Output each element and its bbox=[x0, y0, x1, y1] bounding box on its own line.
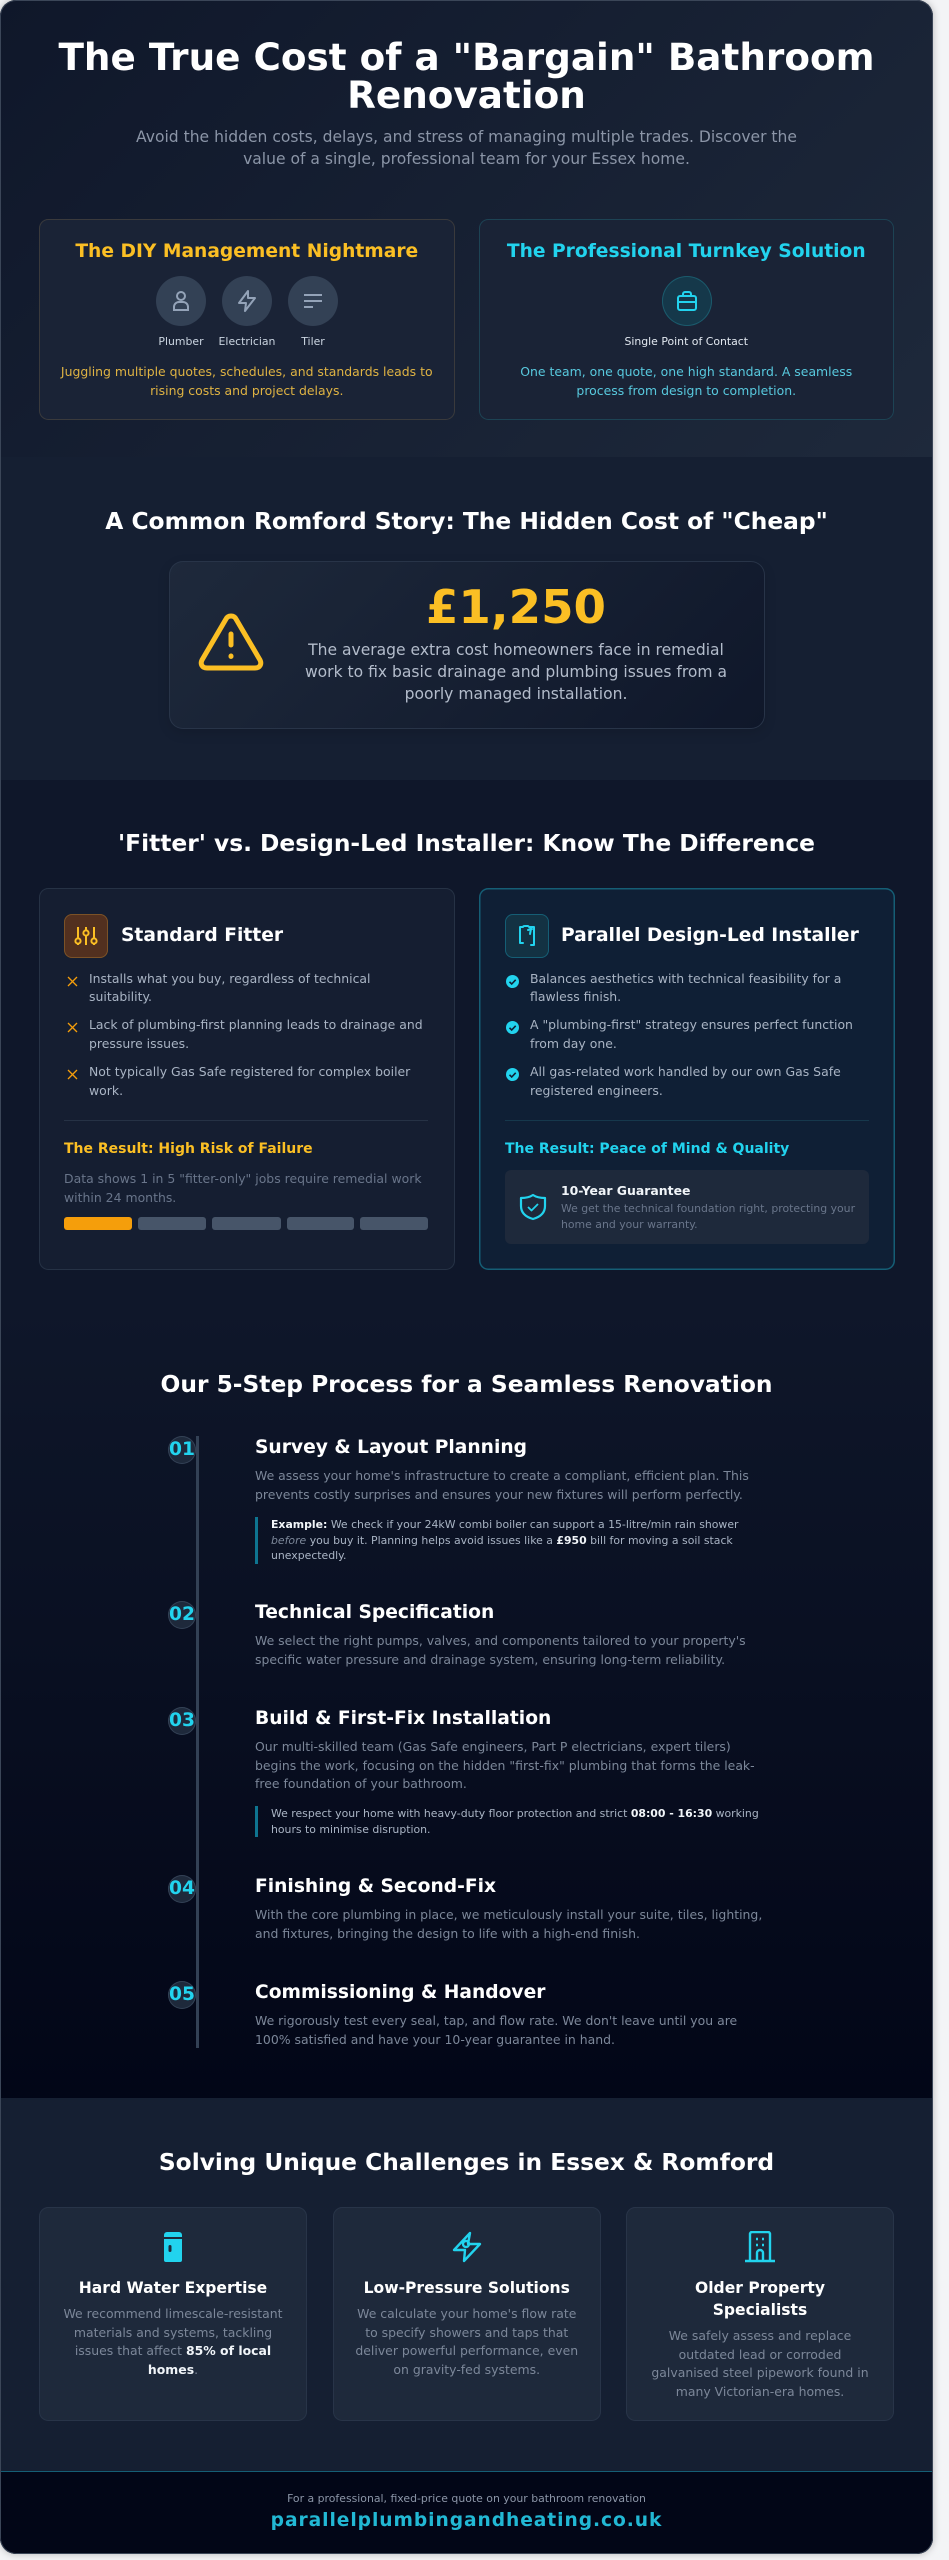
item: check 1: Balances aesthetics with technical feasibility for a bbox=[530, 970, 841, 986]
list: installer benefits bbox=[506, 970, 853, 1098]
badge 02: 02 bbox=[169, 1604, 195, 1625]
item: check 2: from day one. bbox=[530, 1036, 617, 1051]
heading: installer: Parallel Design-Led Installer bbox=[561, 925, 859, 946]
text: DIY summary bbox=[60, 364, 433, 398]
footer text: For a professional, fixed-price quote on your bathroom renovation bbox=[287, 2492, 646, 2505]
text: materials and systems, tackling bbox=[74, 2325, 272, 2340]
callout: working hours: We respect your home with heavy-duty floor protection and strict 08:00 - 16:30 working bbox=[271, 1807, 759, 1820]
step text: With the core plumbing in place, we meticulously install your suite, tiles, lighting, bbox=[255, 1907, 762, 1922]
step 01 bbox=[168, 1436, 749, 1564]
heading: process: Our 5-Step Process for a Seamless Renovation bbox=[161, 1370, 772, 1398]
section: header bbox=[0, 0, 933, 457]
text: result data: within 24 months. bbox=[64, 1190, 176, 1205]
callout: example: unexpectedly. bbox=[271, 1549, 347, 1562]
heading: fitter vs installer: 'Fitter' vs. Design-Led Installer: Know The Difference bbox=[118, 829, 815, 857]
title: Renovation bbox=[347, 73, 586, 117]
item: check 2: A "plumbing-first" strategy ensures perfect function bbox=[530, 1017, 853, 1032]
icon: plumber bbox=[156, 276, 206, 326]
title: Specialists bbox=[713, 2301, 807, 2319]
text: We safely assess and replace bbox=[669, 2328, 851, 2343]
step text bbox=[255, 1468, 749, 1502]
step text bbox=[255, 2013, 737, 2047]
callout: example bbox=[255, 1517, 738, 1564]
text: DIY summary: Juggling multiple quotes, schedules, and standards leads to bbox=[61, 364, 433, 379]
title bbox=[695, 2279, 825, 2319]
step text: specific water pressure and drainage system, ensuring long-term reliability. bbox=[255, 1652, 725, 1667]
step 03 bbox=[168, 1707, 759, 1837]
subtitle: value of a single, professional team for your Essex home. bbox=[243, 150, 690, 168]
item: cross 1 bbox=[68, 970, 370, 1004]
step title: Commissioning & Handover bbox=[255, 1982, 545, 2003]
badge 05 bbox=[168, 1981, 196, 2009]
item: check 2 bbox=[506, 1017, 853, 1051]
title: The True Cost of a "Bargain" Bathroom bbox=[58, 35, 875, 79]
heading: result: The Result: High Risk of Failure bbox=[64, 1141, 313, 1157]
step text: free foundation of your bathroom. bbox=[255, 1776, 467, 1791]
step 04 bbox=[168, 1875, 762, 1941]
step 05 bbox=[168, 1981, 737, 2047]
icon: tiler bbox=[288, 276, 338, 326]
badge 01: 01 bbox=[169, 1439, 195, 1460]
icon: building bbox=[745, 2231, 775, 2262]
icon: sliders bbox=[64, 914, 108, 958]
text: result data bbox=[64, 1171, 422, 1205]
callout: example: Example: We check if your 24kW combi boiler can support a 15-litre/min rain shower bbox=[271, 1518, 738, 1531]
title: Hard Water Expertise bbox=[79, 2279, 267, 2297]
heading: turnkey: The Professional Turnkey Solution bbox=[507, 240, 866, 262]
icon: water softener bbox=[164, 2232, 182, 2262]
callout: hidden cost bbox=[169, 561, 764, 729]
text: DIY summary: rising costs and project delays. bbox=[150, 383, 343, 398]
label: single point of contact: Single Point of Contact bbox=[624, 335, 748, 348]
badge 03 bbox=[168, 1707, 196, 1735]
timeline line bbox=[196, 1436, 198, 2048]
item: cross 2 bbox=[68, 1017, 423, 1051]
callout: working hours bbox=[255, 1806, 759, 1837]
panel: standard fitter bbox=[39, 888, 454, 1270]
text: deliver powerful performance, even bbox=[355, 2343, 578, 2358]
title: Older Property bbox=[695, 2279, 825, 2297]
badge 02 bbox=[168, 1601, 196, 1629]
icon: shield bbox=[520, 1194, 546, 1220]
text: homes. bbox=[148, 2362, 198, 2377]
stat: 1,250 pounds: £1,250 bbox=[426, 581, 606, 635]
panel: hard water bbox=[39, 2207, 307, 2421]
callout: example: before you buy it. Planning helps avoid issues like a £950 bill for moving a soil stack bbox=[271, 1534, 733, 1547]
subtitle bbox=[136, 128, 797, 168]
step text: begins the work, focusing on the hidden "first-fix" plumbing that forms the leak- bbox=[255, 1758, 755, 1773]
step 02 bbox=[168, 1601, 746, 1667]
text: stat description: The average extra cost homeowners face in remedial bbox=[308, 641, 724, 659]
text: result data: Data shows 1 in 5 "fitter-only" jobs require remedial work bbox=[64, 1171, 422, 1186]
label: plumber: Plumber bbox=[158, 335, 204, 348]
footer bbox=[0, 2471, 933, 2554]
text: turnkey summary: One team, one quote, one high standard. A seamless bbox=[520, 364, 852, 379]
item: check 1: flawless finish. bbox=[530, 989, 621, 1004]
step title: Finishing & Second-Fix bbox=[255, 1876, 496, 1897]
badge 03: 03 bbox=[169, 1710, 195, 1731]
step title: Build & First-Fix Installation bbox=[255, 1708, 551, 1729]
step text: and fixtures, bringing the design to life with a high-end finish. bbox=[255, 1926, 640, 1941]
subtitle: Avoid the hidden costs, delays, and stress of managing multiple trades. Discover the bbox=[136, 128, 797, 146]
step text bbox=[255, 1633, 746, 1667]
section: local challenges bbox=[0, 2098, 933, 2471]
step text: We select the right pumps, valves, and components tailored to your property's bbox=[255, 1633, 746, 1648]
badge 04 bbox=[168, 1875, 196, 1903]
heading: Solving Unique Challenges in Essex & Romford bbox=[159, 2148, 774, 2176]
callout: 10-year guarantee bbox=[505, 1170, 869, 1244]
item: cross 3: work. bbox=[89, 1082, 123, 1098]
step text: Our multi-skilled team (Gas Safe engineers, Part P electricians, expert tilers) bbox=[255, 1739, 731, 1754]
label: tiler: Tiler bbox=[301, 335, 325, 348]
section: fitter vs installer and process bbox=[0, 780, 933, 2098]
item: check 3: All gas-related work handled by our own Gas Safe bbox=[530, 1064, 841, 1079]
item: cross 3: Not typically Gas Safe registered for complex boiler bbox=[89, 1064, 410, 1079]
text: issues that affect 85% of local bbox=[75, 2343, 271, 2358]
text: galvanised steel pipework found in bbox=[651, 2365, 869, 2380]
step text: We assess your home's infrastructure to create a compliant, efficient plan. This bbox=[255, 1468, 749, 1483]
title bbox=[58, 35, 875, 117]
list: fitter drawbacks bbox=[68, 970, 423, 1098]
icon: electrician bbox=[222, 276, 272, 326]
panel: older property bbox=[626, 2207, 894, 2421]
heading: standard fitter: Standard Fitter bbox=[121, 925, 283, 946]
text: on gravity-fed systems. bbox=[393, 2362, 540, 2377]
text: to specify showers and taps that bbox=[365, 2325, 568, 2340]
panel: DIY management nightmare bbox=[39, 219, 454, 420]
step text: 100% satisfied and have your 10-year guarantee in hand. bbox=[255, 2032, 615, 2047]
text: guarantee description: We get the technical foundation right, protecting your bbox=[561, 1202, 855, 1215]
icon: briefcase bbox=[662, 276, 712, 326]
text: outdated lead or corroded bbox=[679, 2347, 841, 2362]
item: check 3: registered engineers. bbox=[530, 1082, 663, 1098]
step title: Technical Specification bbox=[255, 1602, 494, 1623]
text: guarantee description: home and your warranty. bbox=[561, 1218, 698, 1231]
text: stat description: poorly managed installation. bbox=[405, 685, 627, 703]
panel: design-led installer bbox=[478, 888, 894, 1270]
item: cross 2: pressure issues. bbox=[89, 1036, 189, 1051]
panel: professional turnkey solution bbox=[478, 219, 894, 420]
text bbox=[63, 2306, 283, 2377]
text: guarantee title: 10-Year Guarantee bbox=[561, 1183, 690, 1198]
text bbox=[651, 2328, 869, 2399]
item: cross 1: Installs what you buy, regardless of technical bbox=[89, 970, 370, 986]
item: cross 1: suitability. bbox=[89, 989, 152, 1004]
step text: prevents costly surprises and ensures your new fixtures will perform perfectly. bbox=[255, 1487, 743, 1502]
badge 05: 05 bbox=[169, 1984, 195, 2005]
icon: document bbox=[505, 914, 549, 958]
step text: We rigorously test every seal, tap, and flow rate. We don't leave until you are bbox=[255, 2013, 737, 2028]
text: many Victorian-era homes. bbox=[676, 2384, 844, 2399]
text: We calculate your home's flow rate bbox=[357, 2306, 576, 2321]
text: We recommend limescale-resistant bbox=[63, 2306, 283, 2321]
label: electrician: Electrician bbox=[219, 335, 275, 348]
text: turnkey summary: process from design to completion. bbox=[576, 383, 796, 398]
icon: bolt bbox=[452, 2232, 482, 2262]
badge 01 bbox=[168, 1436, 196, 1464]
step text bbox=[255, 1739, 755, 1791]
text: turnkey summary bbox=[520, 364, 852, 398]
item: cross 3 bbox=[68, 1064, 410, 1098]
section: Romford story bbox=[0, 457, 933, 780]
badge 04: 04 bbox=[169, 1878, 195, 1899]
text bbox=[355, 2306, 578, 2377]
item: cross 2: Lack of plumbing-first planning leads to drainage and bbox=[89, 1017, 423, 1032]
item: check 3 bbox=[506, 1064, 841, 1098]
heading: result: The Result: Peace of Mind & Quality bbox=[505, 1141, 789, 1157]
chart: one in five bar bbox=[64, 1217, 428, 1230]
footer link: parallelplumbingandheating.co.uk bbox=[271, 2510, 662, 2531]
panel: low pressure bbox=[332, 2207, 601, 2421]
heading: A Common Romford Story: The Hidden Cost of "Cheap" bbox=[105, 507, 828, 535]
text: stat description bbox=[305, 641, 727, 703]
title: Low-Pressure Solutions bbox=[364, 2279, 570, 2297]
callout: working hours: hours to minimise disruption. bbox=[271, 1823, 431, 1836]
heading: DIY: The DIY Management Nightmare bbox=[75, 240, 418, 262]
text: stat description: work to fix basic drainage and plumbing issues from a bbox=[305, 663, 727, 681]
icon: warning bbox=[198, 614, 264, 670]
step title: Survey & Layout Planning bbox=[255, 1437, 527, 1458]
text: guarantee description bbox=[561, 1202, 856, 1231]
item: check 1 bbox=[506, 970, 841, 1004]
step text bbox=[255, 1907, 762, 1941]
